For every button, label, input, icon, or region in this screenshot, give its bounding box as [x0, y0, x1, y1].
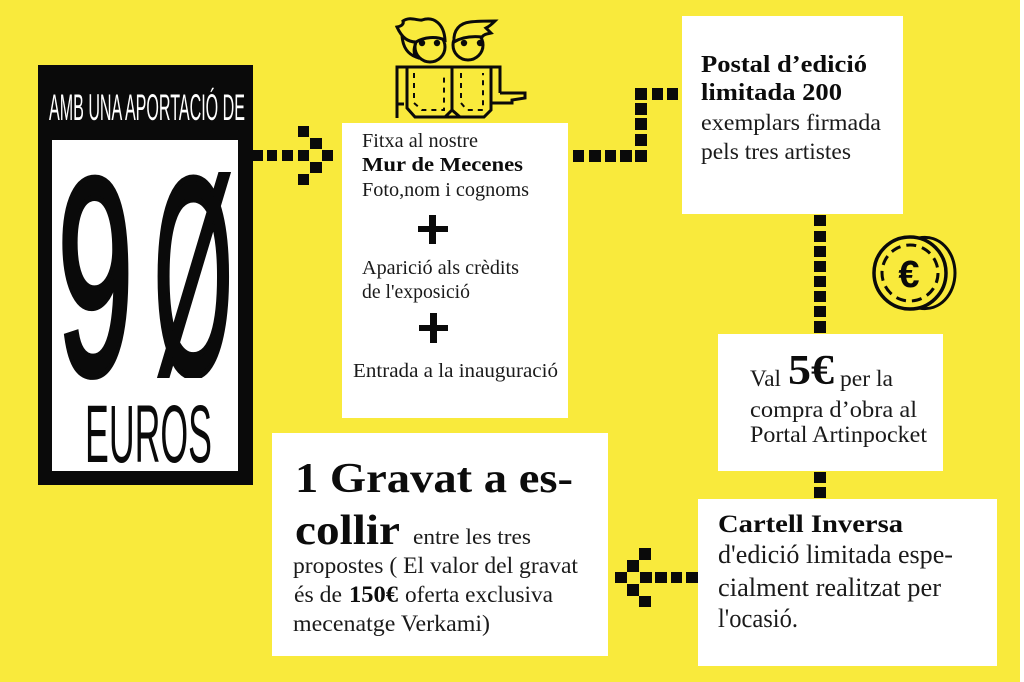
icon: plus two — [419, 313, 448, 343]
text: foto nom i cognoms: Foto,nom i cognoms — [362, 179, 529, 201]
text: l'ocasió.: l'ocasió. — [718, 604, 798, 633]
icon: euro coin — [874, 237, 955, 309]
text: d'edició limitada espe-: d'edició limitada espe- — [718, 540, 953, 569]
heading: 1 gravat a es-: 1 Gravat a es- — [295, 456, 573, 502]
text: postal d'edició: Postal d’edició — [701, 52, 867, 78]
panel: postal edició limitada — [682, 16, 903, 214]
text: pels tres artistes: pels tres artistes — [701, 139, 851, 164]
icon: plus one — [418, 215, 448, 244]
text: limitada 200: limitada 200 — [701, 80, 842, 106]
connector: postal to voucher — [814, 215, 826, 333]
panel: mur de mecenes — [342, 123, 568, 418]
panel: 90 euros black badge: EUROS — [85, 389, 212, 480]
text: oferta exclusiva: oferta exclusiva — [405, 582, 553, 607]
value: 5 euros: 5€ — [788, 348, 834, 394]
text: aparició als crèdits: Aparició als crèdits — [362, 257, 519, 279]
icon: two characters reading — [397, 19, 525, 118]
text: de l'exposició: de l'exposició — [362, 281, 470, 303]
text: fitxa al nostre: Fitxa al nostre — [362, 130, 478, 152]
text: entrada a la inauguració: Entrada a la inauguració — [353, 360, 558, 382]
text: cartell inversa: Cartell Inversa — [718, 511, 904, 538]
text: portal artinpocket: Portal Artinpocket — [750, 422, 928, 447]
icon: euro coin: € — [898, 254, 920, 296]
arrow: poster to engraving — [615, 548, 698, 607]
panel: val 5 euros — [718, 334, 943, 471]
big number: 90: 9 — [58, 120, 133, 434]
text: val: Val — [750, 366, 781, 391]
text: per la: per la — [840, 366, 893, 391]
text: compra d'obra al: compra d’obra al — [750, 397, 917, 422]
panel: 90 euros black badge — [38, 65, 253, 485]
text: cialment realitzat per: cialment realitzat per — [718, 573, 941, 602]
text: és de: és de — [294, 582, 342, 607]
panel: cartell inversa — [698, 499, 997, 666]
text: exemplars firmada: exemplars firmada — [701, 110, 881, 135]
connector: voucher to poster — [814, 472, 826, 498]
heading: collir: collir — [295, 508, 400, 554]
text: propostes: propostes ( El valor del gravat — [293, 553, 579, 578]
text: AMB UNA APORTACIÓ DE — [49, 87, 245, 128]
big number: 90 — [62, 172, 231, 380]
text: entre les tres: entre les tres — [413, 524, 531, 549]
arrow: stepped connector to postal — [573, 88, 678, 162]
text: mecenatge verkami: mecenatge Verkami) — [293, 611, 490, 636]
big number: 90: Ø — [154, 120, 233, 434]
panel: 1 gravat a escollir — [272, 433, 608, 656]
text: mur de mecenes: Mur de Mecenes — [362, 154, 523, 176]
value: 150 euros: 150€ — [349, 582, 399, 607]
arrow: badge to wall of patrons — [253, 126, 333, 185]
